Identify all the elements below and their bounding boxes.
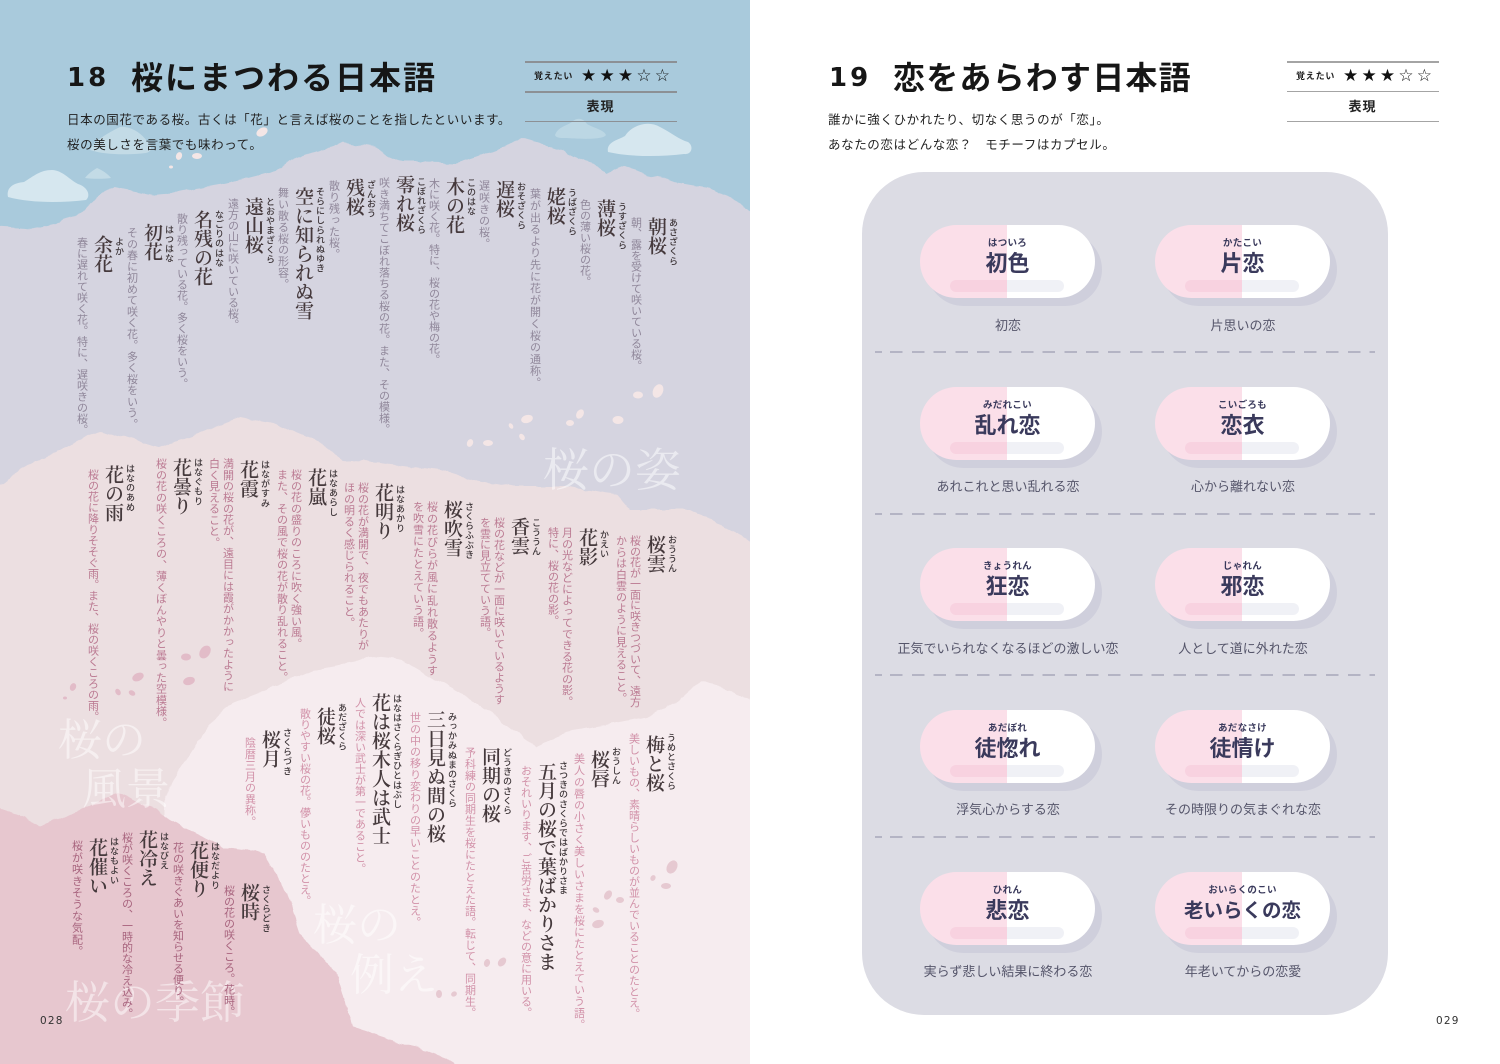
term: 梅と桜: うめとさくら [665, 733, 678, 791]
term: 花は桜木人は武士 [352, 693, 404, 874]
rating badge: 表現 [1348, 96, 1376, 115]
watermark: 桜の季節: 桜の季節 [65, 966, 245, 1031]
term: 余花: 余花 [90, 235, 117, 273]
term: 花曇り: はなぐもり [192, 458, 205, 506]
term: 空に知られぬ雪: 舞い散る桜の形容。 [276, 187, 292, 290]
capsule: 狂恋: きょうれん [983, 558, 1032, 572]
term: 花嵐: 花嵐 [304, 468, 331, 506]
term: 花便り [170, 841, 222, 1007]
watermark: 桜の風景: 風景 [82, 753, 170, 817]
term: 残桜: 散り残った桜。 [326, 180, 342, 260]
term: 零れ桜: こぼれざくら [415, 177, 428, 235]
heading: 桜にまつわる日本語: 桜にまつわる日本語 [131, 53, 437, 99]
term: 花の雨: 花の雨 [101, 465, 128, 522]
term: 朝桜 [628, 217, 680, 371]
term: 梅と桜: 梅と桜 [642, 735, 669, 792]
term: 名残の花: 散り残っている花。多く桜をいう。 [174, 213, 190, 389]
heading: section number 19: 19 [829, 63, 871, 93]
term: 遠山桜: とおやまざくら [264, 197, 277, 264]
capsule: 乱れ恋 [920, 387, 1095, 460]
term: 花明り [342, 482, 407, 651]
term: 桜吹雪: 桜吹雪 [440, 500, 467, 557]
term: 花嵐: また、その風で桜の花が散り乱れること。 [274, 469, 290, 683]
term: 花催い: 花催い [85, 838, 112, 895]
rating badge: 覚えたい [1296, 69, 1335, 82]
term: 桜唇: おうしん [610, 747, 623, 785]
term: 姥桜: 葉が出るより先に花が開く桜の通称。 [528, 188, 544, 389]
term: 遠山桜: 遠山桜 [241, 197, 268, 254]
term: 遅桜: おそざくら [515, 182, 528, 230]
capsule: 恋衣: こいごろも [1218, 397, 1267, 411]
term: 零れ桜 [376, 175, 428, 435]
term: 花影: 花影 [575, 528, 602, 566]
capsule: 徒惚れ: あだぼれ [988, 720, 1027, 734]
term: 香雲 [478, 517, 543, 705]
term: 桜吹雪 [410, 500, 476, 676]
term: 姥桜: うばざくら [566, 188, 579, 236]
term: 花便り: はなだより [209, 842, 222, 890]
capsule: 邪恋 [1155, 548, 1330, 621]
term: 朝桜: あさざくら [667, 218, 680, 266]
term: 花明り: ほの明るく感じられること。 [342, 482, 358, 628]
term: 薄桜: うすざくら [616, 202, 629, 250]
term: 初花: 初花 [140, 223, 167, 261]
term: 花冷え: はなびえ [158, 832, 171, 870]
term: 残桜: 残桜 [342, 178, 369, 216]
term: 木の花: 木に咲く花。特に、桜の花や梅の花。 [426, 178, 442, 365]
term: 桜吹雪: 桜の花びらが風に乱れ散るようす [424, 501, 440, 676]
term: 桜月 [242, 728, 294, 827]
capsule: 乱れ恋: 乱れ恋 [974, 408, 1040, 440]
capsule: 徒情け: あだなさけ [1218, 720, 1267, 734]
term: 名残の花: 名残の花 [190, 210, 217, 286]
capsule: 邪恋: じゃれん [1223, 558, 1262, 572]
term: 残桜: ざんおう [365, 180, 378, 218]
watermark: 桜の風景 [58, 704, 170, 817]
term: 桜月: さくらづき [281, 728, 294, 776]
term: 香雲: 桜の花などが一面に咲いているようす [492, 517, 508, 705]
capsule: 初色 [920, 225, 1095, 298]
term: 花曇り: 花曇り [169, 458, 196, 515]
term: 桜吹雪: を吹雪にたとえていう語。 [410, 501, 426, 639]
term: 木の花: このはな [465, 178, 478, 216]
term: 香雲: こううん [530, 518, 543, 556]
capsule: 老いらくの恋: 老いらくの恋 [1184, 894, 1301, 923]
capsule: 悲恋 [920, 872, 1095, 945]
capsule: 狂恋 [920, 548, 1095, 621]
term: 桜雲: おううん [666, 535, 679, 573]
term: 徒桜: あだざくら [336, 703, 349, 751]
term: 五月の桜で葉ばかりさま: おそれいります、ご苦労さま、などの意に用いる。 [518, 765, 534, 1018]
term: 花影: かえい [598, 530, 611, 559]
term: 花霞: はながすみ [259, 460, 272, 508]
term: 姥桜: 姥桜 [543, 187, 570, 225]
term: 花霞 [206, 458, 272, 692]
term: 同期の桜: 同期の桜 [478, 747, 505, 823]
term: 花明り: 花明り [371, 483, 398, 540]
term: 花霞: 白く見えること。 [206, 458, 222, 548]
term: 遅桜 [476, 180, 528, 250]
capsule: 乱れ恋: みだれこい [983, 397, 1032, 411]
term: 花便り: 花便り [186, 841, 213, 898]
heading: section number 18: 18 [67, 63, 109, 93]
capsule: 片恋: 片恋 [1220, 246, 1264, 278]
term: 徒桜: 徒桜 [313, 707, 340, 745]
term: 梅と桜: 美しいもの、素晴らしいものが並んでいることのたとえ。 [626, 733, 642, 1019]
term: 名残の花 [174, 210, 226, 389]
term: 朝桜: 朝、露を受けて咲いている桜。 [628, 217, 644, 371]
term: 桜雲: 桜の花が一面に咲きつづいて、遠方 [628, 535, 644, 707]
term: 桜時: 桜の花の咲くころ。花時。 [222, 885, 238, 1017]
term: 薄桜: 色の薄い桜の花。 [578, 199, 594, 287]
term: 花冷え: 桜が咲くころの、一時的な冷え込み。 [120, 832, 136, 1019]
term: 空に知られぬ雪: そらにしられぬゆき [314, 187, 327, 273]
capsule: 老いらくの恋: おいらくのこい [1208, 882, 1277, 896]
term: 花冷え [120, 830, 171, 1019]
capsule: 片恋: かたこい [1223, 235, 1262, 249]
term: 花嵐: 桜の花の盛りのころに吹く強い風。 [288, 469, 304, 649]
caption: あれこれと思い乱れる恋: あれこれと思い乱れる恋 [936, 476, 1080, 495]
capsule: 片恋 [1155, 225, 1330, 298]
caption: 人として道に外れた恋: 人として道に外れた恋 [1178, 638, 1308, 657]
term: 姥桜 [528, 187, 579, 389]
caption: その時限りの気まぐれな恋: その時限りの気まぐれな恋 [1165, 799, 1321, 818]
term: 三日見ぬ間の桜: 世の中の移り変わりの早いことのたとえ。 [408, 712, 424, 928]
caption: 心から離れない恋: 心から離れない恋 [1191, 476, 1295, 495]
term: 花明り: 桜の花が満開で、夜でもあたりが [356, 482, 372, 651]
term: 花便り: 花の咲きぐあいを知らせる便り。 [170, 842, 186, 1007]
heading: 恋をあらわす日本語: 恋をあらわす日本語 [893, 53, 1192, 99]
term: 桜唇: 桜唇 [587, 750, 614, 788]
term: 花は桜木人は武士: 花は桜木人は武士 [368, 693, 395, 845]
watermark: 桜の姿: 桜の姿 [543, 434, 681, 500]
term: 桜唇: 美人の唇の小さく美しいさまを桜にたとえていう語。 [572, 753, 588, 1030]
term: 花霞: 満開の桜の花が、遠目には霞がかかったように [220, 458, 236, 692]
term: 初花 [124, 223, 176, 430]
term: 花催い: 桜が咲きそうな気配。 [70, 840, 86, 957]
capsule: 悲恋: 悲恋 [985, 893, 1030, 925]
term: 初花: その春に初めて咲く花。多く桜をいう。 [124, 227, 140, 430]
term: 桜時 [222, 883, 273, 1017]
term: 桜月: 桜月 [258, 730, 285, 768]
term: 花嵐 [274, 468, 340, 683]
term: 遅桜: 遅咲きの桜。 [476, 180, 492, 250]
term: 花の雨: 桜の花に降りそそぐ雨。また、桜の咲くころの雨。 [86, 469, 102, 722]
rating badge: ★★★☆☆ [1343, 66, 1435, 86]
text block: introduction: 日本の国花である桜。古くは「花」と言えば桜のことを指したといいます。 [67, 109, 511, 128]
term: 零れ桜: 咲き満ちてこぼれ落ちる桜の花。また、その模様。 [376, 177, 392, 435]
watermark: 桜の例え: 桜の [313, 889, 401, 953]
capsule: 恋衣: 恋衣 [1220, 408, 1264, 440]
panel: capsule list background [862, 172, 1388, 1015]
term: 余花 [74, 235, 126, 435]
term: 余花: 春に遅れて咲く花。特に、遅咲きの桜。 [74, 237, 90, 435]
term: 同期の桜: 予科練の同期生を桜にたとえた語。転じて、同期生。 [462, 747, 478, 1018]
term: 花催い: はなもよい [108, 837, 121, 885]
term: 木の花: 木の花 [442, 177, 469, 234]
term: 花冷え: 花冷え [135, 830, 162, 887]
caption: 年老いてからの恋愛: 年老いてからの恋愛 [1185, 961, 1301, 980]
rating badge: 覚えたい [534, 69, 573, 82]
capsule: 老いらくの恋 [1155, 872, 1330, 945]
capsule: 邪恋: 邪恋 [1220, 569, 1264, 601]
rating badge [1287, 61, 1439, 122]
rating badge: ★★★☆☆ [581, 66, 673, 86]
term: 花明り: はなあかり [394, 485, 407, 533]
caption: 初恋: 初恋 [995, 315, 1021, 334]
term: 花影 [546, 527, 611, 707]
term: 花嵐: はなあらし [327, 469, 340, 517]
term: 零れ桜: 零れ桜 [392, 175, 419, 232]
term: 初花: はつはな [163, 225, 176, 263]
term: 花の雨 [86, 464, 137, 722]
term: 香雲: 香雲 [507, 517, 534, 555]
term: 花霞: 花霞 [236, 460, 263, 498]
term: 遠山桜: 遠方の山に咲いている桜。 [226, 198, 242, 330]
term: 空に知られぬ雪: 空に知られぬ雪 [291, 187, 318, 320]
term: 桜月: 陰暦三月の異称。 [242, 737, 258, 827]
term: 遅桜: 遅桜 [492, 180, 519, 218]
caption: 浮気心からする恋: 浮気心からする恋 [956, 799, 1060, 818]
term: 余花: よか [113, 237, 126, 256]
watermark: 桜の例え [313, 889, 438, 1003]
term: 同期の桜 [462, 747, 514, 1018]
term: 空に知られぬ雪 [276, 187, 327, 320]
term: 桜時: 桜時 [237, 883, 264, 921]
term: 桜雲 [614, 535, 679, 708]
text block: introduction: 誰かに強くひかれたり、切なく思うのが「恋」。 [828, 109, 1109, 128]
term: 桜時: さくらどき [260, 885, 273, 933]
term: 花影: 月の光などによってできる花の影。 [560, 527, 576, 707]
term: 遠山桜 [226, 197, 277, 330]
term: 花曇り: 桜の花の咲くころの、薄くぼんやりと曇った空模様。 [154, 458, 170, 728]
illustration: sky, clouds, layered cherry blossom hills and petals [0, 119, 750, 1064]
term: 五月の桜で葉ばかりさま: 五月の桜で葉ばかりさま [534, 762, 561, 971]
term: 花曇り [154, 458, 205, 728]
capsule: 徒惚れ [920, 710, 1095, 783]
caption: 実らず悲しい結果に終わる恋: 実らず悲しい結果に終わる恋 [924, 961, 1092, 980]
term: 朝桜: 朝桜 [644, 217, 671, 255]
term: 木の花 [426, 177, 478, 365]
rating badge: 表現 [586, 96, 614, 115]
term: 残桜 [326, 178, 378, 260]
term: 桜雲: 桜雲 [643, 535, 670, 573]
capsule: 徒惚れ: 徒惚れ [974, 731, 1040, 763]
term: 梅と桜 [626, 733, 678, 1019]
term: 徒桜 [298, 703, 349, 906]
term: 香雲: を雲に見立てていう語。 [478, 517, 494, 638]
page number 029: 029 [1436, 1015, 1460, 1027]
term: 同期の桜: どうきのさくら [501, 748, 514, 815]
term: 花催い [70, 837, 121, 957]
watermark: 桜の例え: 例え [350, 939, 438, 1003]
watermark: 桜の風景: 桜の [58, 704, 146, 768]
capsule: 悲恋: ひれん [993, 882, 1022, 896]
caption: 片思いの恋: 片思いの恋 [1210, 315, 1276, 334]
term: 桜唇 [572, 747, 623, 1030]
rating badge [525, 61, 677, 122]
term: 薄桜 [578, 199, 629, 287]
term: 徒桜: 散りやすい桜の花。儚いもののたとえ。 [298, 708, 314, 906]
term: 三日見ぬ間の桜: 三日見ぬ間の桜 [423, 710, 450, 843]
term: 五月の桜で葉ばかりさま: さつきのさくらではばかりさま [557, 761, 570, 895]
capsule: 初色: 初色 [985, 246, 1030, 278]
text block: introduction [828, 109, 1115, 153]
text block: introduction: 桜の美しさを言葉でも味わって。 [67, 134, 263, 153]
term: 三日見ぬ間の桜 [408, 710, 459, 928]
term: 桜吹雪: さくらふぶき [463, 502, 476, 560]
text block: introduction [67, 109, 511, 153]
term: 桜雲: からは白雲のように見えること。 [614, 535, 630, 704]
capsule: 初色: はついろ [988, 235, 1027, 249]
term: 花は桜木人は武士: はなはさくらぎひとはぶし [391, 694, 404, 809]
capsule: 徒情け: 徒情け [1209, 731, 1276, 763]
text block: introduction: あなたの恋はどんな恋？ モチーフはカプセル。 [828, 134, 1115, 153]
capsule: 恋衣 [1155, 387, 1330, 460]
term: 名残の花: なごりのはな [213, 210, 226, 268]
caption: 正気でいられなくなるほどの激しい恋: 正気でいられなくなるほどの激しい恋 [897, 638, 1118, 657]
capsule: 徒情け [1155, 710, 1330, 783]
panel: left page 桜にまつわる日本語 [0, 0, 750, 1064]
capsule: 狂恋: 狂恋 [985, 569, 1030, 601]
term: 花影: 特に、桜の花の影。 [546, 527, 562, 626]
term: 薄桜: 薄桜 [593, 199, 620, 237]
term: 花は桜木人は武士: 人では深い武士が第一であること。 [352, 697, 368, 874]
page number 028: 028 [40, 1015, 64, 1027]
term: 花の雨: はなのあめ [124, 464, 137, 512]
term: 五月の桜で葉ばかりさま [518, 761, 570, 1018]
term: 三日見ぬ間の桜: みっかみぬまのさくら [446, 712, 459, 808]
